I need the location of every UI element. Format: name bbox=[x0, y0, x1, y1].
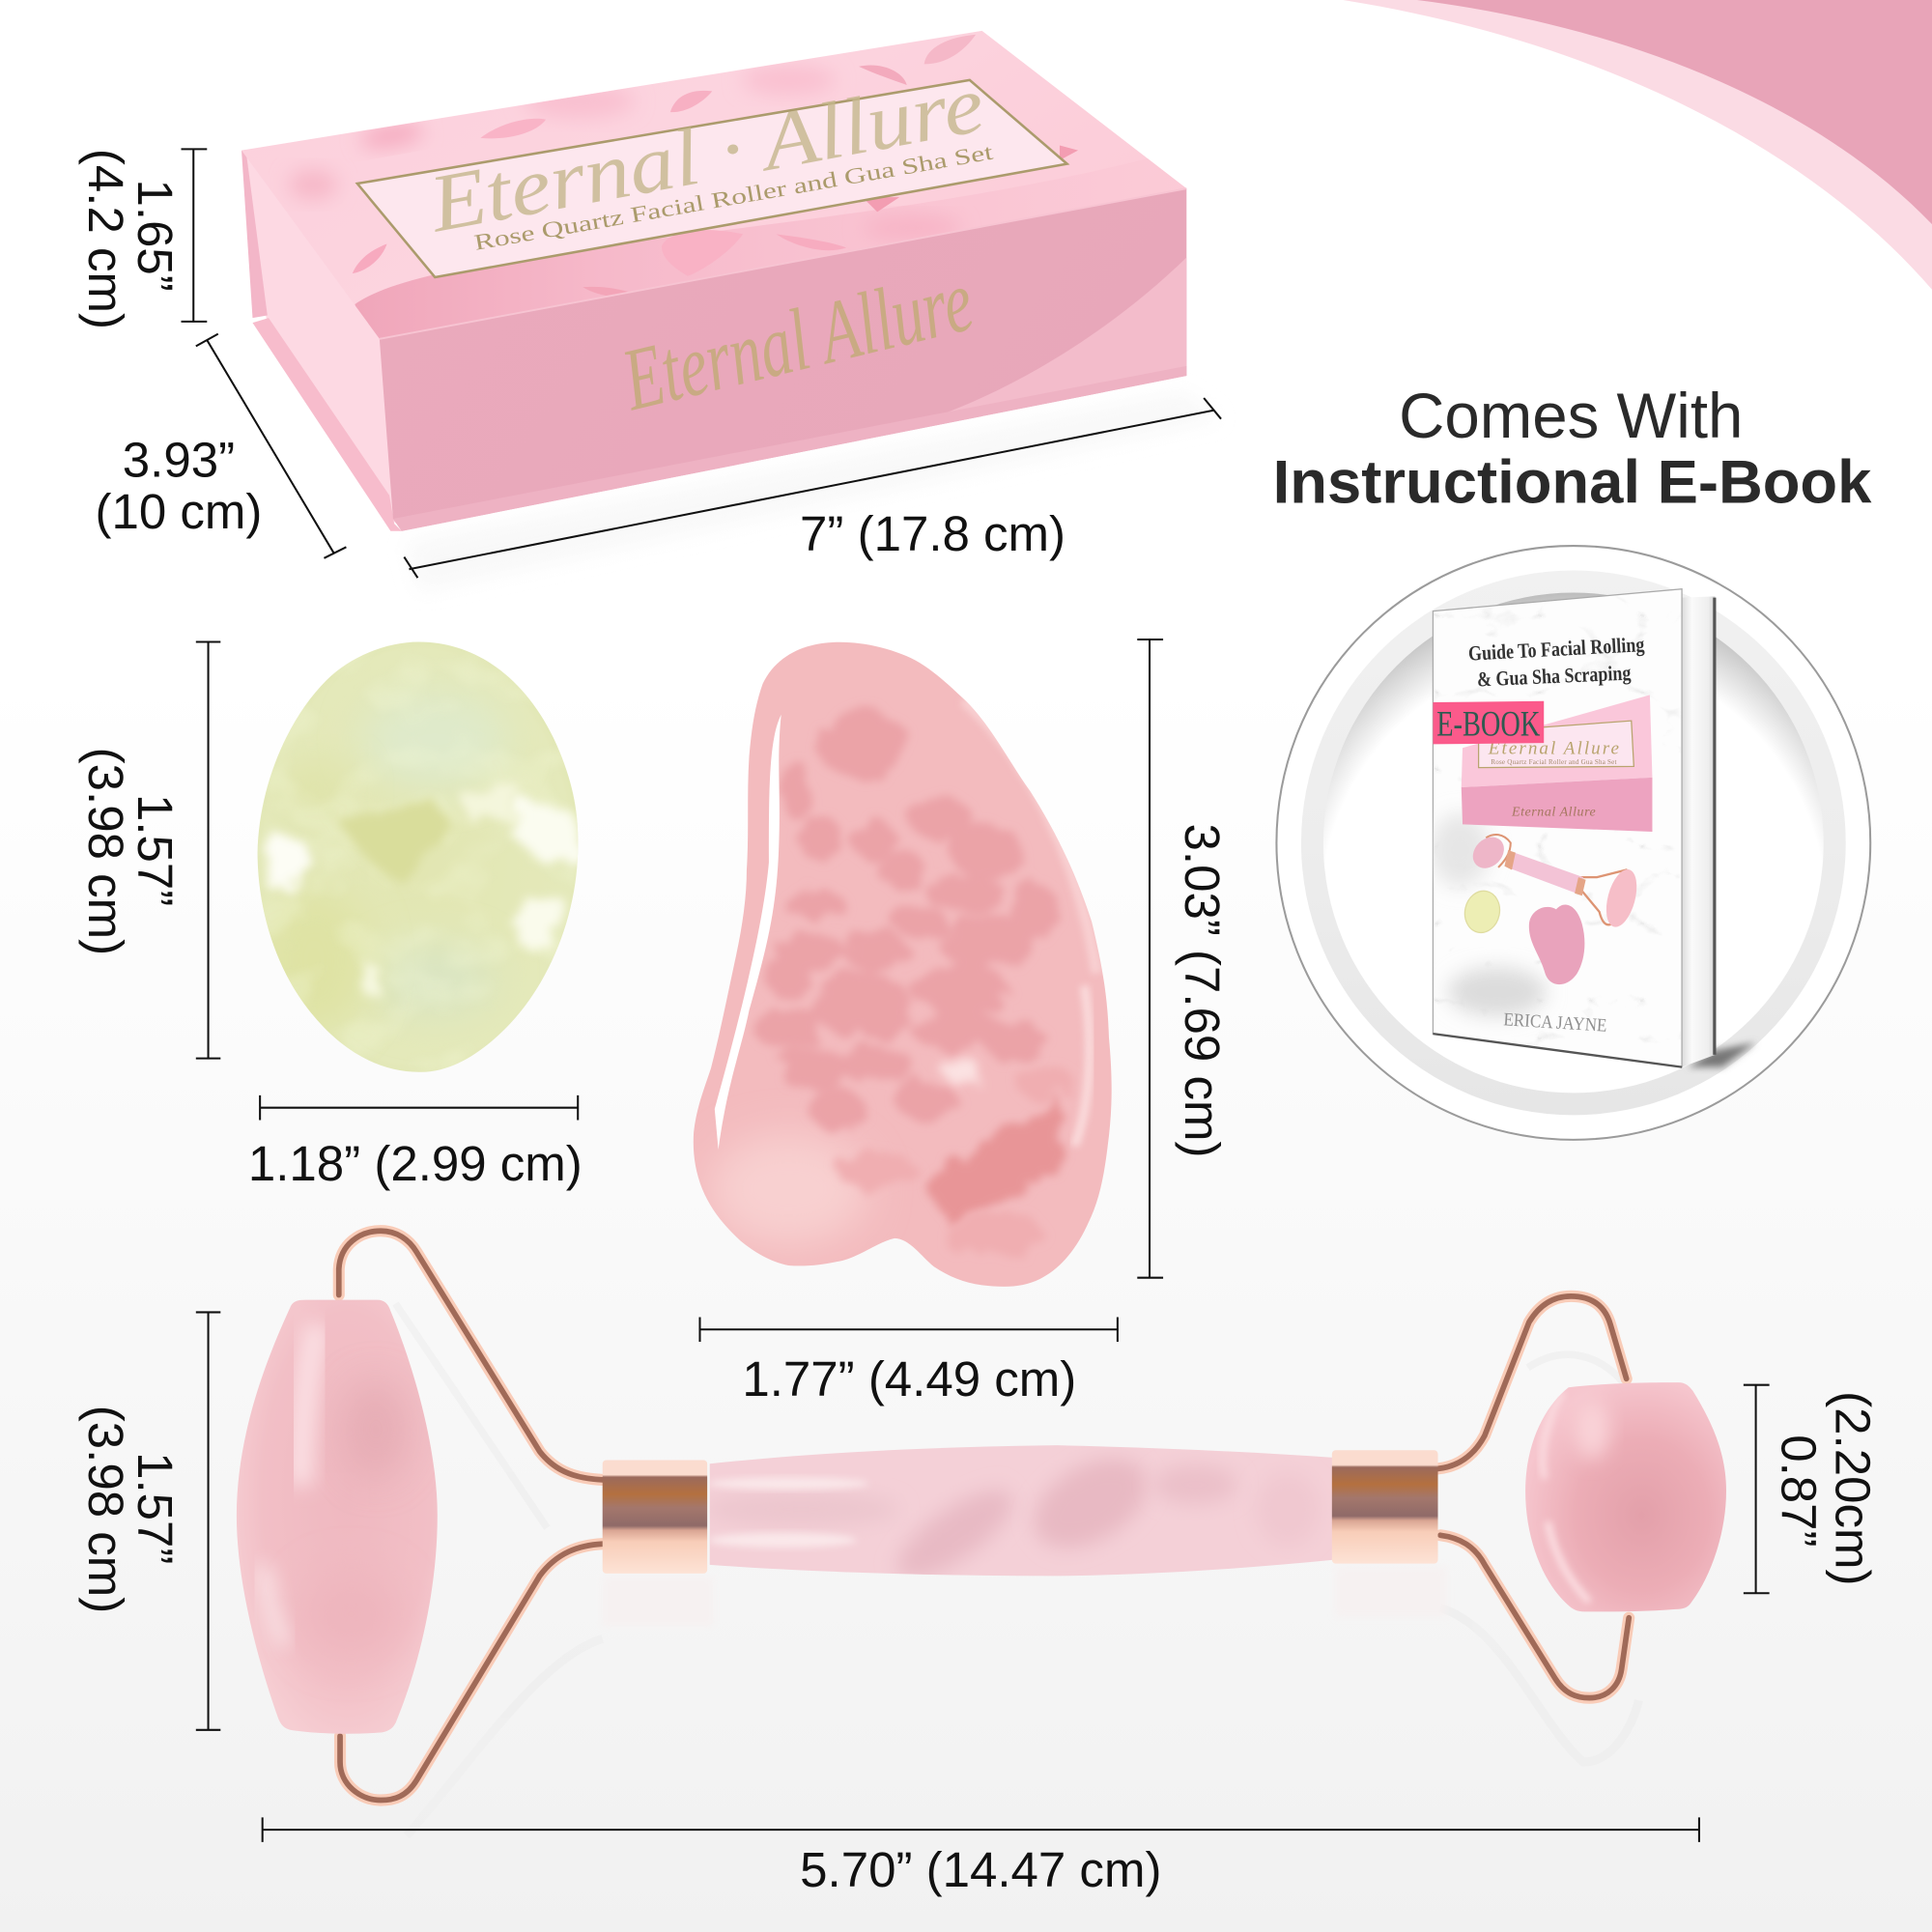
dimension: box height bbox=[78, 149, 207, 329]
e-book badge circle bbox=[1276, 546, 1870, 1140]
right wires bbox=[1438, 1296, 1629, 1698]
e-book mini products bbox=[1461, 831, 1642, 984]
left wires bbox=[339, 1231, 603, 1801]
box spine bbox=[242, 151, 268, 318]
product: gift box bbox=[242, 31, 1186, 531]
e-book title: Guide To Facial Rolling bbox=[1467, 633, 1645, 666]
dimension: box depth: 3.93” bbox=[123, 433, 235, 488]
e-book mini box: Eternal Allure bbox=[1488, 739, 1620, 759]
e-book ribbon: E-BOOK bbox=[1436, 703, 1541, 743]
dimension: box width: 7” (17.8 cm) bbox=[800, 506, 1065, 561]
roller reflection bbox=[395, 1303, 1638, 1836]
gua sha darker slab bbox=[926, 1099, 1062, 1222]
dimension: box height: (4.2 cm) bbox=[78, 149, 133, 329]
dimension: small roller height: 0.87” bbox=[1771, 1435, 1826, 1548]
e-book pages bbox=[1682, 596, 1756, 1067]
gua sha highlight bbox=[715, 715, 781, 1150]
e-book mini box: Rose Quartz Facial Roller and Gua Sha Set bbox=[1491, 758, 1617, 766]
dimension: jade height bbox=[78, 642, 220, 1059]
e-book author: ERICA JAYNE bbox=[1503, 1009, 1607, 1037]
box tray side bbox=[252, 318, 402, 531]
dimension: roller length bbox=[263, 1817, 1699, 1897]
dimension: jade height: (3.98 cm) bbox=[78, 748, 133, 955]
dimension: roller length: 5.70” (14.47 cm) bbox=[800, 1842, 1161, 1897]
right collar bbox=[1332, 1450, 1438, 1564]
dimension: box depth: (10 cm) bbox=[95, 484, 262, 539]
dimension: jade width bbox=[248, 1095, 582, 1191]
decorative corner swoosh bbox=[1343, 0, 1932, 290]
dimension: gua sha height: 3.03” (7.69 cm) bbox=[1175, 824, 1230, 1157]
e-book mini box bbox=[1462, 695, 1652, 832]
heading: comes with e-book: Instructional E-Book bbox=[1273, 448, 1872, 516]
dimension: large roller height: 1.57” bbox=[128, 1452, 183, 1564]
dimension: box height: 1.65” bbox=[128, 179, 183, 292]
gua sha quartz cells bbox=[754, 710, 1057, 1130]
box label bbox=[357, 59, 1067, 277]
box top face bbox=[242, 31, 1186, 345]
dimension: gua sha width bbox=[699, 1318, 1118, 1406]
box soft shadow and reflection bbox=[407, 392, 1220, 591]
box label: Eternal · Allure bbox=[422, 59, 991, 250]
dimension: small roller height bbox=[1744, 1385, 1881, 1593]
dimension: jade width: 1.18” (2.99 cm) bbox=[248, 1136, 582, 1191]
small roller head bbox=[1525, 1382, 1726, 1611]
roller handle bbox=[709, 1445, 1332, 1577]
e-book cover: & Gua Sha Scraping bbox=[1477, 662, 1632, 691]
product: rose quartz gua sha bbox=[694, 642, 1112, 1287]
heading: comes with e-book bbox=[1273, 381, 1872, 516]
dimension: gua sha height bbox=[1137, 639, 1230, 1278]
dimension: gua sha width: 1.77” (4.49 cm) bbox=[742, 1351, 1076, 1406]
dimension: jade height: 1.57” bbox=[128, 794, 183, 906]
dimension: box width bbox=[404, 398, 1221, 578]
box front face bbox=[380, 188, 1188, 531]
large roller head bbox=[237, 1300, 438, 1734]
front logo: Eternal Allure bbox=[612, 250, 981, 430]
heading: comes with e-book: Comes With bbox=[1399, 381, 1743, 451]
e-book cover bbox=[1431, 589, 1682, 1067]
box label: Rose Quartz Facial Roller and Gua Sha Set bbox=[472, 140, 995, 255]
dimension: small roller height: (2.20cm) bbox=[1826, 1391, 1881, 1585]
e-book mini box: Eternal Allure bbox=[1511, 804, 1596, 819]
left collar bbox=[603, 1460, 707, 1574]
dimension: large roller height bbox=[78, 1312, 220, 1730]
dimension: large roller height: (3.98 cm) bbox=[78, 1406, 133, 1613]
box left side panel bbox=[246, 154, 395, 524]
product: facial roller bbox=[237, 1231, 1726, 1836]
product: jade stone bbox=[258, 642, 582, 1073]
dimension: box depth bbox=[95, 334, 346, 558]
